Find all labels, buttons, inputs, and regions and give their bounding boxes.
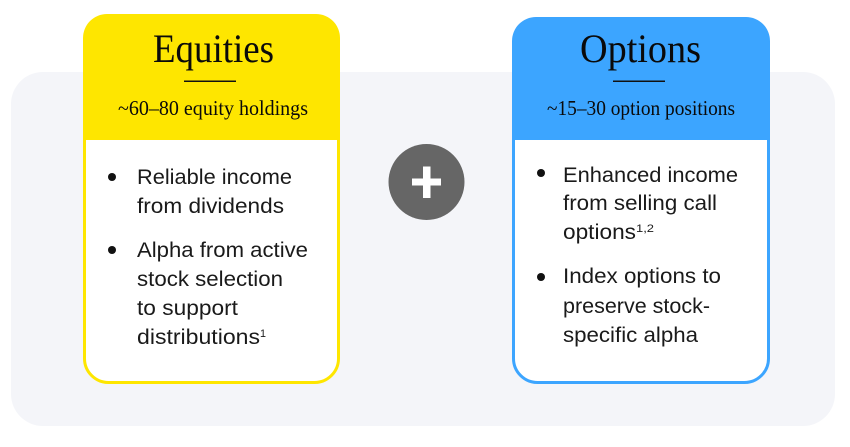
bullet: reliable income: Reliable income [137, 166, 292, 189]
bullet: enhanced income: from selling call [563, 192, 717, 215]
equities heading rule [184, 80, 236, 82]
bullet: alpha: to support [137, 297, 238, 320]
bullet: index options: specific alpha [563, 324, 698, 347]
bullet: alpha: distributions [137, 326, 260, 349]
equities header [83, 14, 340, 140]
equities card body [84, 20, 338, 382]
equities holdings count: ~60–80 equity holdings [118, 96, 308, 120]
options heading: Options [580, 26, 701, 71]
panel: equities [83, 14, 340, 382]
panel: options [512, 17, 770, 382]
options positions count: ~15–30 option positions [547, 96, 735, 120]
bullet: alpha: Alpha from active [137, 239, 308, 262]
bullet: enhanced income: 1,2 [636, 223, 654, 235]
bullet: alpha [108, 239, 308, 349]
options card body [514, 22, 768, 382]
bullet: reliable income [108, 166, 292, 218]
bullet: alpha: stock selection [137, 268, 283, 291]
bullet: enhanced income: options [563, 221, 636, 244]
bullet: index options [537, 265, 721, 347]
bullet: index options: Index options to [563, 265, 721, 288]
bullet: enhanced income [537, 164, 738, 244]
icon: plus [388, 144, 464, 220]
bullet: index options: preserve stock- [563, 295, 710, 318]
bullet: enhanced income: Enhanced income [563, 164, 738, 187]
options heading rule [613, 80, 665, 82]
options header [512, 17, 770, 140]
equities heading: Equities [153, 26, 274, 71]
bullet: reliable income: from dividends [137, 195, 284, 218]
background panel [11, 72, 835, 426]
bullet: alpha: 1 [260, 328, 266, 340]
